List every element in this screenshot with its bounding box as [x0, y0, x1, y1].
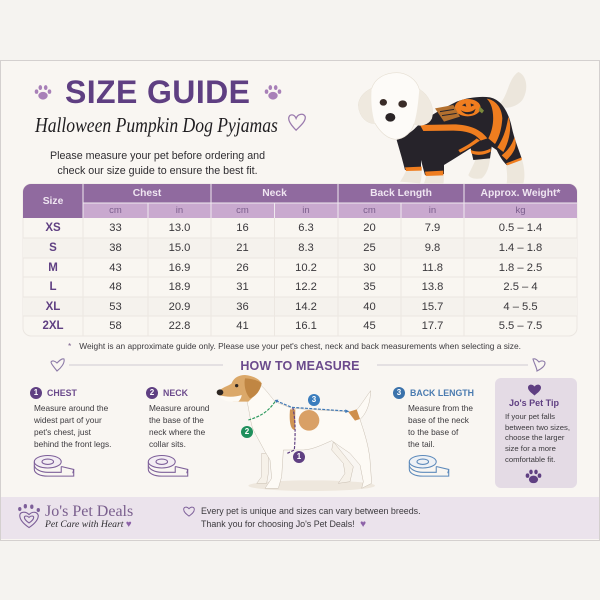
- step 2 number: [146, 387, 158, 399]
- table rows: 1.8 – 2.5: [499, 262, 542, 274]
- table unit row: cm: [109, 205, 122, 216]
- tip text: [505, 412, 570, 464]
- tip text: between two sizes,: [505, 423, 570, 432]
- brand tagline: Pet Care with Heart ♥: [45, 519, 132, 530]
- table rows: 33: [109, 222, 122, 234]
- icon: paw: [526, 470, 542, 484]
- icon: heart outline: [288, 114, 306, 131]
- table rows: 45: [363, 320, 376, 332]
- table rows: 16.9: [169, 262, 190, 274]
- marker 2: 2: [245, 427, 249, 436]
- table rows: 21: [236, 242, 249, 254]
- table rows: 17.7: [422, 320, 443, 332]
- step 1 text: [34, 403, 112, 449]
- step 3 number: [393, 387, 405, 399]
- table rows: 38: [109, 242, 122, 254]
- step 1 text: behind the front legs.: [34, 439, 112, 449]
- table rows: 5.5 – 7.5: [499, 320, 542, 332]
- table rows: 7.9: [425, 222, 440, 234]
- marker 1: 1: [297, 452, 301, 461]
- table headers: Neck: [262, 188, 287, 199]
- table rows: 11.8: [422, 262, 443, 274]
- footer band: [1, 497, 599, 539]
- step 2 text: the base of the: [149, 415, 204, 425]
- table rows: XL: [46, 301, 60, 313]
- table rows: 1.4 – 1.8: [499, 242, 542, 254]
- icon: right paw: [264, 85, 282, 100]
- table rows: 6.3: [298, 222, 314, 234]
- photo: dog in pumpkin pyjamas: [358, 72, 526, 184]
- table rows: 13.0: [169, 222, 190, 234]
- footer message: [201, 506, 421, 530]
- step 1 number: 1: [34, 388, 38, 397]
- marker 2: [241, 426, 253, 438]
- table rows: 13.8: [422, 281, 443, 293]
- step 3 number: 3: [397, 388, 401, 397]
- step 2 text: neck where the: [149, 427, 205, 437]
- table rows: 14.2: [295, 301, 317, 313]
- table rows: 2.5 – 4: [503, 281, 538, 293]
- icon: heart outline: [183, 506, 195, 517]
- table unit row: in: [302, 205, 310, 216]
- step 2 text: Measure around: [149, 403, 209, 413]
- divider right: [377, 358, 546, 372]
- table unit row: [109, 205, 526, 216]
- step 2 number: 2: [150, 388, 154, 397]
- table rows: L: [49, 281, 57, 293]
- brand name: Jo's Pet Deals: [45, 503, 133, 520]
- table rows: 12.2: [295, 281, 317, 293]
- table unit row: kg: [515, 205, 526, 216]
- icon: left paw: [34, 85, 52, 100]
- table headers: Size: [43, 196, 63, 207]
- footer message: Every pet is unique and sizes can vary between breeds.: [201, 506, 421, 516]
- table rows: 25: [363, 242, 376, 254]
- table rows: M: [48, 262, 58, 274]
- intro text: check our size guide to ensure the best fit.: [57, 164, 258, 176]
- table rows: 2XL: [42, 320, 64, 332]
- table rows: 8.3: [298, 242, 314, 254]
- tip text: size for a more: [505, 444, 556, 453]
- table rows: 15.0: [169, 242, 190, 254]
- table rows: 22.8: [169, 320, 190, 332]
- icon: heart: [528, 384, 541, 396]
- table rows: 26: [236, 262, 249, 274]
- divider left: [50, 358, 223, 372]
- table rows: 40: [363, 301, 376, 313]
- section heading: HOW TO MEASURE: [240, 359, 360, 373]
- table rows: 4 – 5.5: [503, 301, 538, 313]
- step 3 text: to the base of: [408, 427, 458, 437]
- step 2 text: collar sits.: [149, 439, 186, 449]
- table rows: 35: [363, 281, 376, 293]
- step 3 text: Measure from the: [408, 403, 473, 413]
- table headers: Chest: [133, 188, 161, 199]
- icon: tape measure: [408, 455, 450, 477]
- marker 3: [308, 394, 320, 406]
- table rows: 20.9: [169, 301, 190, 313]
- step 1: chest: [30, 387, 112, 477]
- step 3 text: base of the neck: [408, 415, 469, 425]
- table rows: 15.7: [422, 301, 443, 313]
- table rows: 0.5 – 1.4: [499, 222, 542, 234]
- table rows: 16.1: [295, 320, 317, 332]
- step 1 text: widest part of your: [34, 415, 102, 425]
- panel: Jo's Pet Tip: [495, 378, 577, 488]
- table unit row: in: [176, 205, 183, 216]
- step 3 text: [408, 403, 473, 449]
- marker 1: [293, 451, 305, 463]
- dog measurement illustration: [216, 375, 375, 491]
- step 1 number: [30, 387, 42, 399]
- footnote: * Weight is an approximate guide only. Please use your pet's chest, neck and back measurements when selecting a size.: [68, 341, 521, 351]
- table headers: [43, 188, 560, 207]
- step 3 text: the tail.: [408, 439, 435, 449]
- step 2: neck: [146, 387, 209, 477]
- tip text: choose the larger: [505, 433, 564, 442]
- table rows: 48: [109, 281, 122, 293]
- subtitle: Halloween Pumpkin Dog Pyjamas: [35, 113, 278, 137]
- step 1 text: pet's chest, just: [34, 427, 91, 437]
- logo icon: [18, 504, 40, 528]
- table rows: 41: [236, 320, 249, 332]
- table rows: S: [49, 242, 57, 254]
- tip text: If your pet falls: [505, 412, 555, 421]
- table rows: 43: [109, 262, 122, 274]
- icon: tape measure: [148, 455, 188, 477]
- icon: tape measure: [34, 455, 74, 477]
- tip text: comfortable fit.: [505, 455, 555, 464]
- table rows: 31: [236, 281, 249, 293]
- marker 3: 3: [312, 395, 316, 404]
- table unit row: cm: [363, 205, 376, 216]
- intro text: [50, 150, 265, 176]
- table rows: 20: [363, 222, 376, 234]
- step 3: back length: [393, 387, 474, 477]
- table rows: XS: [45, 222, 61, 234]
- title: SIZE GUIDE: [65, 74, 250, 110]
- step 1 heading: CHEST: [47, 388, 77, 398]
- table unit row: cm: [236, 205, 249, 216]
- table rows: 18.9: [169, 281, 190, 293]
- table unit row: in: [429, 205, 436, 216]
- table background: [22, 184, 578, 336]
- step 3 heading: BACK LENGTH: [410, 388, 474, 398]
- table rows: 53: [109, 301, 122, 313]
- step 2 heading: NECK: [163, 388, 188, 398]
- table headers: Approx. Weight*: [481, 188, 560, 199]
- step 2 text: [149, 403, 209, 449]
- table rows: 16: [236, 222, 249, 234]
- table rows: 9.8: [425, 242, 440, 254]
- table rows: 30: [363, 262, 376, 274]
- table rows: 10.2: [295, 262, 317, 274]
- table rows: 58: [109, 320, 122, 332]
- table rows: 36: [236, 301, 249, 313]
- table rows: [42, 222, 542, 332]
- tip heading: Jo's Pet Tip: [509, 398, 559, 408]
- table headers: Back Length: [370, 188, 432, 199]
- step 1 text: Measure around the: [34, 403, 108, 413]
- intro text: Please measure your pet before ordering and: [50, 150, 265, 162]
- footer message: Thank you for choosing Jo's Pet Deals! ♥: [201, 519, 366, 530]
